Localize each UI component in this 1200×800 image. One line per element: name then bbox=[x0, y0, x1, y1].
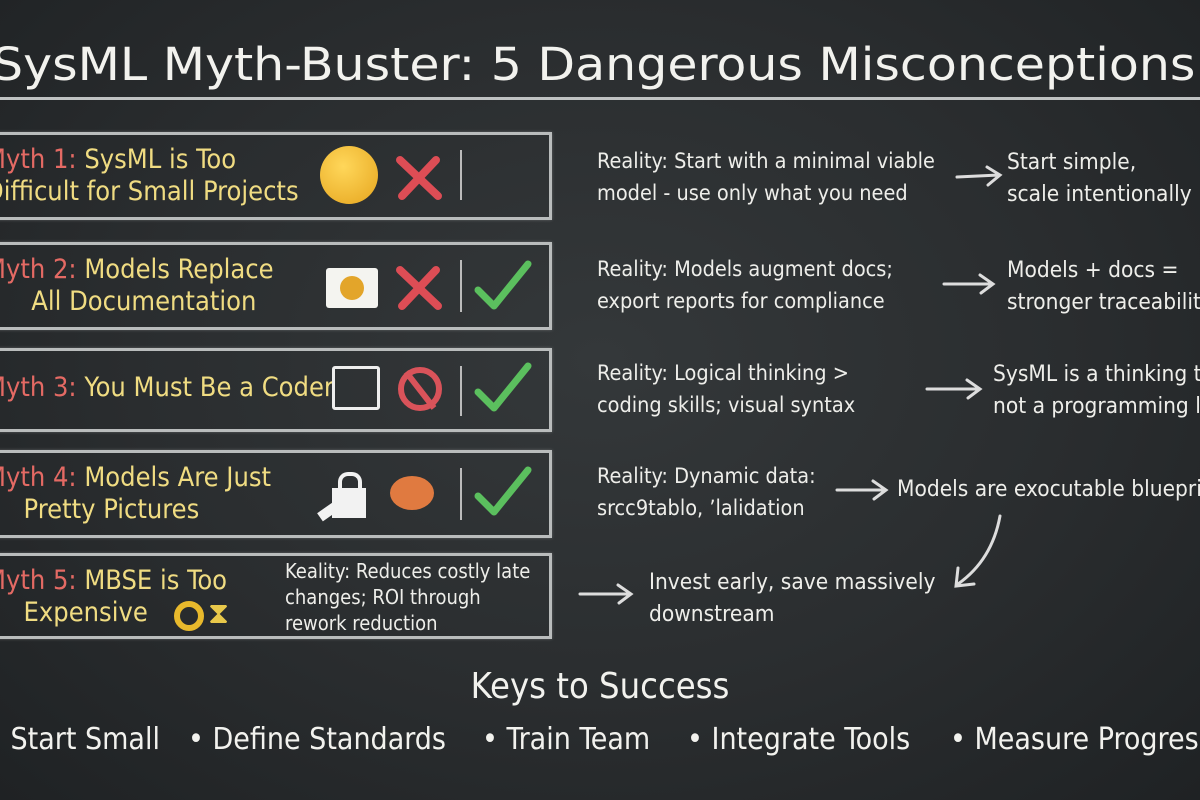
myth 2 text: All Documentation bbox=[31, 286, 256, 317]
outcome 2 bbox=[1007, 257, 1200, 315]
panel: myth 3 bbox=[0, 346, 554, 434]
reality 5 text: rework reduction bbox=[285, 611, 438, 635]
myth 4 text: Pretty Pictures bbox=[24, 494, 199, 525]
reality 2: export reports for compliance bbox=[597, 289, 885, 314]
keys list: • Train Team bbox=[482, 722, 650, 757]
icon: monitor bbox=[332, 366, 380, 410]
reality 4: srcc9tablo, ʼlalidation bbox=[597, 496, 805, 521]
icon: red cross bbox=[396, 266, 442, 310]
icon: lock hand bbox=[317, 472, 366, 522]
icon: thinking face bbox=[320, 146, 378, 204]
arrow 4 bbox=[836, 479, 888, 501]
outcome 1: scale intentionally bbox=[1007, 181, 1192, 207]
icon: gear and hourglass bbox=[174, 596, 229, 631]
reality 2 bbox=[597, 257, 893, 314]
reality 5 text: Keality: Reduces costly late bbox=[285, 559, 530, 583]
panel: myth 5 bbox=[0, 552, 554, 640]
reality 3: Reality: Logical thinking > bbox=[597, 361, 849, 386]
arrow 5 bbox=[578, 583, 634, 605]
myth 5 text: Expensive bbox=[24, 597, 148, 628]
myth 4 text bbox=[0, 462, 271, 525]
icon: green check bbox=[474, 466, 532, 516]
reality 5 text: changes; ROI through bbox=[285, 585, 481, 609]
keys list: • Define Standards bbox=[188, 722, 446, 757]
icon: brain bbox=[390, 476, 434, 510]
reality 2: Reality: Models augment docs; bbox=[597, 257, 893, 282]
reality 1 bbox=[597, 149, 935, 206]
reality 5 text bbox=[285, 559, 530, 635]
icon: red cross bbox=[396, 156, 442, 200]
reality 1: model - use only what you need bbox=[597, 181, 908, 206]
reality 1: Reality: Start with a minimal viable bbox=[597, 149, 935, 174]
keys heading: Keys to Success bbox=[471, 666, 729, 707]
arrow 2 bbox=[942, 273, 996, 295]
icon: green check bbox=[474, 260, 532, 310]
myth 5 text bbox=[0, 565, 227, 628]
myth 1 text bbox=[0, 144, 299, 207]
title underline bbox=[0, 97, 1200, 100]
outcome 1 bbox=[1007, 149, 1192, 207]
icon: document coin bbox=[326, 268, 378, 308]
reality 4: Reality: Dynamic data: bbox=[597, 464, 816, 489]
outcome 1: Start simple, bbox=[1007, 149, 1136, 175]
reality 3: coding skills; visual syntax bbox=[597, 393, 855, 418]
icon: prohibited bbox=[398, 367, 442, 411]
outcome 5: downstream bbox=[649, 601, 775, 627]
outcome 2: Models + docs = bbox=[1007, 257, 1178, 283]
title: SysML Myth-Buster: 5 Dangerous Misconceptions bbox=[0, 38, 1195, 91]
icon: gear and hourglass: ⧗ bbox=[208, 596, 229, 631]
keys list bbox=[0, 722, 1200, 757]
keys list: • Integrate Tools bbox=[687, 722, 910, 757]
curved arrow down bbox=[954, 514, 1002, 588]
icon: green check bbox=[474, 362, 532, 412]
arrow 1 bbox=[956, 165, 1002, 187]
arrow 3 bbox=[926, 378, 982, 400]
outcome 5: Invest early, save massively bbox=[649, 569, 935, 595]
outcome 3 bbox=[993, 361, 1200, 419]
outcome 5 bbox=[649, 569, 935, 627]
reality 3 bbox=[597, 361, 855, 418]
panel: myth 1 bbox=[0, 130, 554, 222]
myth 2 text bbox=[0, 254, 274, 317]
panel: myth 4 bbox=[0, 448, 554, 540]
reality 4 bbox=[597, 464, 816, 521]
panel: myth 2 bbox=[0, 240, 554, 332]
